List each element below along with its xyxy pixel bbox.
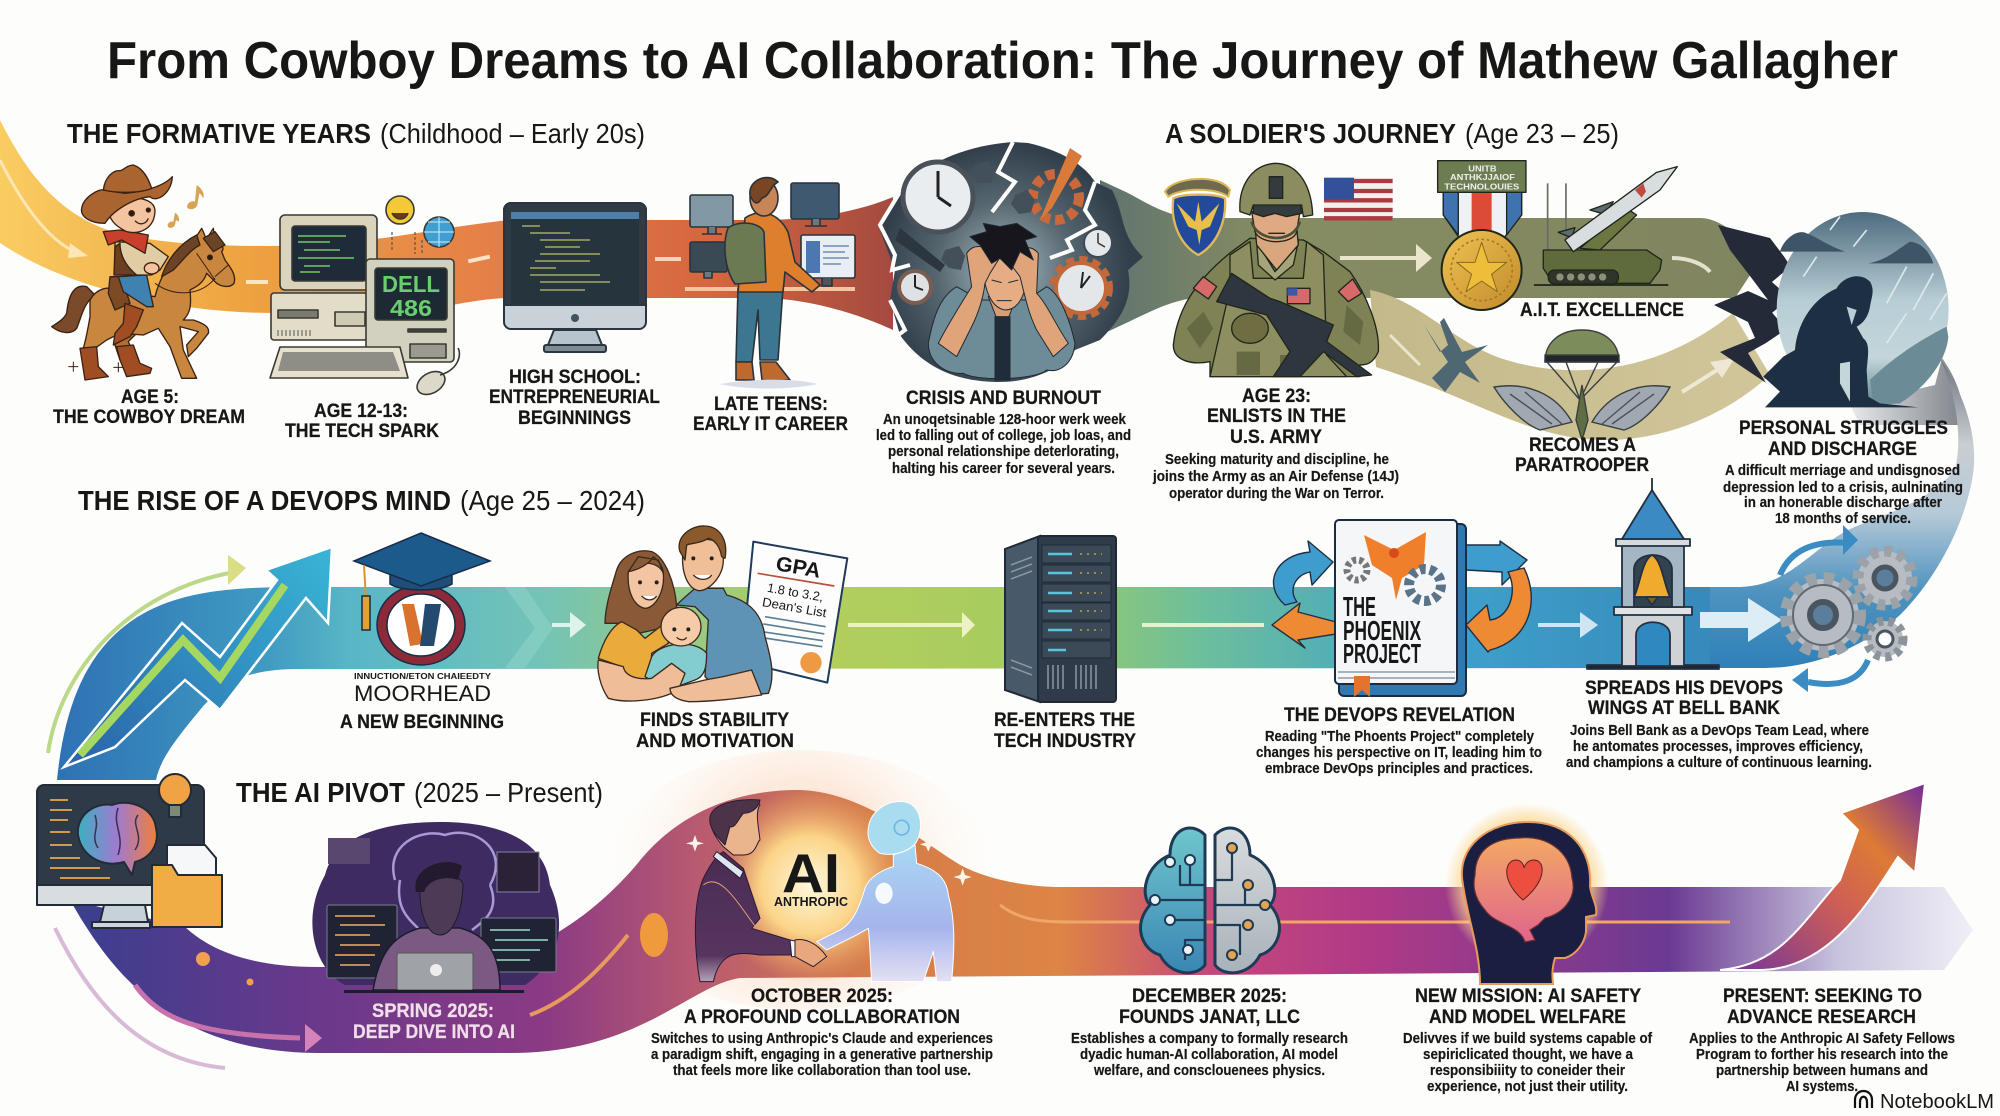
ribbon: shade beneath storm circle (1850, 358, 1968, 425)
ribbon: devops mind (57, 587, 1710, 780)
icon: high school monitor (504, 203, 646, 352)
cuff (790, 940, 797, 957)
small clock left (899, 271, 931, 303)
head (750, 180, 778, 216)
spurs (68, 362, 123, 372)
jeans (118, 275, 153, 307)
label: struggles (1739, 418, 1948, 460)
anthropic label: ANTHROPIC (774, 894, 849, 909)
floating panels (328, 838, 370, 864)
label: new mission: NEW MISSION: AI SAFETY (1415, 986, 1641, 1007)
icon: crisis and burnout (878, 142, 1143, 382)
horse tail (52, 286, 95, 333)
hind boots (80, 347, 108, 380)
far hind leg (115, 330, 140, 360)
text: army body (1152, 452, 1399, 502)
woman's arm (598, 660, 685, 701)
label: stability (636, 710, 794, 752)
label: present (1723, 986, 1922, 1028)
text: struggles body: A difficult merriage and undisgnosed (1725, 463, 1960, 479)
text: october body (651, 1031, 993, 1079)
crack lines (880, 142, 1095, 345)
label: age 12-13 (285, 401, 439, 442)
man's hair (710, 800, 760, 845)
label: october 2025: A PROFOUND COLLABORATION (684, 1007, 960, 1028)
orange gear and shard (1033, 148, 1082, 220)
right code panel (481, 918, 556, 972)
arrow: final rise (1720, 783, 1925, 970)
text: december body: welfare, and consclouenees physics. (1093, 1063, 1325, 1079)
glow (712, 787, 908, 983)
bulb (159, 774, 191, 806)
certificate (742, 542, 847, 683)
text: mission body: experience, not just their utility. (1427, 1079, 1628, 1095)
label: high school: HIGH SCHOOL: (509, 367, 641, 388)
icon: handshake with AI (686, 787, 972, 983)
label: age 23: AGE 23: (1242, 386, 1311, 407)
helmet (1240, 163, 1313, 217)
vest (1210, 242, 1347, 377)
monitor two (366, 259, 454, 362)
text: army body: operator during the War on Terror. (1169, 486, 1384, 502)
hat (81, 177, 172, 223)
brain outline (393, 833, 496, 930)
moorhead wordmark: MOORHEAD (354, 681, 491, 706)
bell (1634, 555, 1670, 597)
peach glow behind handshake (600, 750, 1000, 1010)
monitor one (280, 215, 377, 290)
thin mauve trail (55, 928, 225, 1068)
text: crisis body: personal relationshipe deterlorating, (888, 444, 1119, 460)
monitor bottom right (801, 235, 855, 278)
ribbon: soldier olive path (1100, 180, 1760, 335)
label: crisis: CRISIS AND BURNOUT (906, 388, 1101, 409)
monitor top right (791, 183, 839, 219)
text: crisis body: An unoqetsinable 128-hoor werk week (883, 412, 1127, 428)
label: devops revelation: THE DEVOPS REVELATION (1284, 705, 1515, 726)
laptop (397, 953, 473, 990)
big clock (903, 162, 973, 232)
figures (686, 800, 972, 982)
music notes (168, 185, 204, 228)
smiley (386, 196, 414, 224)
desk edge (685, 287, 855, 291)
text: present body: Program to forther his research into the (1696, 1047, 1948, 1063)
text: october body: Switches to using Anthropic's Claude and experiences (651, 1031, 993, 1047)
code lines (522, 226, 610, 290)
label: re-enters: RE-ENTERS THE (994, 710, 1135, 731)
text: struggles body: 18 months of service. (1775, 511, 1911, 527)
text: mission body: sepiriclicated thought, we have a (1423, 1047, 1634, 1063)
label: high school: BEGINNINGS (518, 408, 631, 429)
small gears (941, 161, 1035, 270)
text: army body: joins the Army as an Air Defense (14J) (1152, 469, 1399, 485)
section: devops heading: (Age 25 – 2024) (460, 485, 645, 516)
signal dashes (392, 232, 422, 254)
text: revelation body: embrace DevOps principles and practices. (1265, 761, 1533, 777)
label: spring 2025: SPRING 2025: (372, 1001, 494, 1022)
icon: server rack (1005, 536, 1116, 702)
hands (795, 940, 827, 967)
circuit traces (1155, 865, 1205, 960)
man's hair (679, 526, 726, 560)
neck (988, 297, 1017, 318)
medal plate (1438, 161, 1526, 192)
wings (1494, 386, 1670, 430)
label: paratrooper (1515, 435, 1649, 476)
woman's face (628, 563, 664, 608)
code (50, 800, 110, 878)
face (983, 259, 1027, 310)
chinstrap (1252, 222, 1300, 238)
stressed man (928, 223, 1075, 380)
tassel (364, 565, 366, 600)
left code panel (327, 905, 397, 978)
missile (1558, 202, 1613, 238)
base unit (271, 293, 367, 340)
chest light (875, 883, 893, 904)
label: new beginning: A NEW BEGINNING (340, 712, 504, 733)
tie (995, 317, 1010, 380)
badge tab (1165, 179, 1230, 197)
legs (736, 288, 783, 362)
icon: bell tower (1587, 478, 1719, 669)
label: late teens (693, 394, 848, 435)
icon: family and GPA certificate: Dean's List (761, 595, 828, 620)
dell screen text: DELL (382, 271, 440, 297)
icon: soldier, badge, flag, medal and launcher: TECHNOLOUIES (1444, 181, 1520, 191)
icon: graduation cap and seal (354, 533, 490, 665)
torso (1173, 238, 1378, 377)
label: age 23: U.S. ARMY (1230, 427, 1322, 448)
label: december 2025 (1119, 986, 1300, 1028)
lower tower (1622, 610, 1684, 666)
label: present: PRESENT: SEEKING TO (1723, 986, 1922, 1007)
section: soldier heading: (Age 23 – 25) (1465, 118, 1619, 149)
icon: soldier, badge, flag, medal and launcher: ANTHKJJAIOF (1450, 172, 1515, 182)
icon: phoenix project book (1335, 520, 1466, 697)
jagged backdrop (878, 142, 1143, 382)
man's forearm (670, 670, 762, 702)
rifle (1217, 273, 1372, 377)
label: december 2025: FOUNDS JANAT, LLC (1119, 1007, 1300, 1028)
label: AIT: A.I.T. EXCELLENCE (1520, 300, 1684, 321)
chevrons on devops ribbon (505, 587, 553, 668)
label: age 23: ENLISTS IN THE (1207, 406, 1346, 427)
text: october body: a paradigm shift, engaging in a generative partnership (651, 1047, 993, 1063)
gpa values: 1.8 to 3.2, (766, 581, 824, 604)
arrows around gears (1780, 525, 1868, 692)
horse body (83, 228, 235, 378)
icon: head with heart brain (1445, 803, 1609, 984)
icon: retro computers (270, 196, 459, 399)
text: mission body: Delivves if we build systems capable of (1403, 1031, 1652, 1047)
medal disc (1442, 230, 1522, 310)
rain (1803, 217, 1947, 343)
label: age 12-13: THE TECH SPARK (285, 421, 439, 442)
rider boot (113, 303, 143, 345)
label: age 5 (53, 387, 245, 428)
text: present body: partnership between humans and (1716, 1063, 1928, 1079)
book gears (1409, 569, 1441, 601)
icon: family and GPA certificate (598, 526, 847, 702)
torso (115, 242, 168, 275)
man's face (683, 539, 723, 591)
text: struggles body (1723, 463, 1963, 527)
AI logo: AI (782, 842, 840, 904)
section: formative years heading: (Childhood – Early 20s) (380, 118, 645, 149)
badge shield (1173, 195, 1225, 255)
label: stability: FINDS STABILITY (640, 710, 789, 731)
goggles (1253, 203, 1302, 217)
text: present body: AI systems. (1786, 1079, 1858, 1095)
text: struggles body: in an honerable discharge after (1744, 495, 1942, 511)
icon: dark lightning break (1714, 225, 1793, 393)
section: formative years heading: THE FORMATIVE YEARS (67, 118, 371, 149)
section: formative years heading (67, 118, 645, 149)
right hemisphere (1215, 828, 1279, 973)
label: high school: ENTREPRENEURIAL (489, 387, 660, 408)
small clock right (1084, 229, 1112, 257)
icon: retro computers: 486 (390, 295, 432, 321)
label: spring 2025: DEEP DIVE INTO AI (353, 1022, 515, 1043)
icon: plane silhouette (1424, 318, 1488, 392)
bookmark (1354, 676, 1370, 697)
document (167, 845, 216, 885)
label: spring 2025 (353, 1001, 515, 1043)
section: soldier heading: A SOLDIER'S JOURNEY (1165, 118, 1456, 149)
label: paratrooper: RECOMES A (1529, 435, 1636, 456)
mouse (413, 367, 449, 399)
canopy (1545, 330, 1619, 362)
woman's hair (605, 551, 677, 635)
glove (1232, 313, 1268, 343)
colored brain (78, 803, 157, 875)
hair (970, 223, 1037, 270)
text: bell bank body: Joins Bell Bank as a DevOps Team Lead, where (1570, 723, 1869, 739)
text: crisis body (876, 412, 1131, 477)
section: AI pivot heading: (2025 – Present) (414, 777, 603, 808)
section: AI pivot heading (236, 777, 603, 808)
text: present body (1689, 1031, 1955, 1095)
icon: monitor with brain and folder (37, 774, 222, 928)
man's head (711, 801, 760, 855)
gpa text: GPA (774, 552, 822, 583)
cap board (354, 533, 490, 586)
launcher arm (1580, 208, 1637, 250)
hoodie (738, 213, 820, 292)
woman's shirt (598, 622, 668, 680)
baby body (645, 644, 707, 690)
book stripes (402, 604, 423, 646)
ribbon: paratrooper tan path (1370, 290, 1770, 440)
ribbon: AI pivot (70, 790, 1973, 1053)
flag (1324, 178, 1393, 220)
icon: storm circle with sitting figure (1763, 212, 1949, 407)
text: revelation body: changes his perspective on IT, leading him to (1256, 745, 1542, 761)
keyboard (270, 347, 408, 378)
label: stability: AND MOTIVATION (636, 731, 794, 752)
label: age 12-13: AGE 12-13: (314, 401, 408, 422)
arrow: ribbon flow markers (0, 160, 1782, 1052)
arrows: devops cycle (1272, 541, 1531, 652)
medal plate text: UNITB (1468, 164, 1497, 174)
chest flag (1287, 288, 1310, 304)
saddle (108, 277, 130, 310)
label: bell bank (1585, 678, 1783, 719)
text: crisis body: led to falling out of college, job loas, and (876, 428, 1131, 444)
label: october 2025 (684, 986, 960, 1028)
text: struggles body: depression led to a crisis, aulninating (1723, 480, 1963, 496)
roof (1622, 490, 1684, 539)
shoulder flags (1193, 277, 1217, 299)
text: mission body (1403, 1031, 1652, 1095)
label: re-enters: TECH INDUSTRY (994, 731, 1136, 752)
icon: cowboy on horse (52, 165, 235, 380)
man's shirt (677, 588, 772, 695)
text: mission body: responsibiiity to coneider their (1430, 1063, 1625, 1079)
icon: developer with AI brain (312, 822, 559, 993)
label: age 5: AGE 5: (121, 387, 179, 408)
wrench silhouette (895, 228, 945, 272)
icon: late teen with monitors (685, 178, 855, 388)
section: devops heading: THE RISE OF A DEVOPS MIND (78, 485, 451, 516)
label: bell bank: SPREADS HIS DEVOPS (1585, 678, 1783, 699)
text: december body (1071, 1031, 1348, 1079)
label: struggles: AND DISCHARGE (1768, 439, 1917, 460)
label: struggles: PERSONAL STRUGGLES (1739, 418, 1948, 439)
label: late teens: EARLY IT CAREER (693, 414, 848, 435)
title: From Cowboy Dreams to AI Collaboration: The Journey of Mathew Gallagher (107, 32, 1898, 90)
bandana (103, 230, 148, 253)
medal ribbon (1443, 192, 1522, 237)
lines (1547, 362, 1617, 400)
left hemisphere (1141, 828, 1205, 973)
text: october body: that feels more like collaboration than tool use. (673, 1063, 971, 1079)
label: new mission (1415, 986, 1641, 1028)
label: december 2025: DECEMBER 2025: (1132, 986, 1287, 1007)
icon: gears (1787, 551, 1912, 657)
ribbon accent line (1000, 905, 1730, 922)
arms (938, 246, 998, 357)
figure (1763, 276, 1918, 407)
robot (817, 845, 954, 982)
label: high school (489, 367, 660, 429)
label: late teens: LATE TEENS: (714, 394, 828, 415)
label: paratrooper: PARATROOPER (1515, 455, 1649, 476)
gear clock (1053, 260, 1109, 316)
arrow: rising zigzag (48, 547, 332, 767)
suit (695, 852, 795, 982)
section: AI pivot heading: THE AI PIVOT (236, 777, 405, 808)
text: bell bank body: and champions a culture of continuous learning. (1566, 755, 1872, 771)
icon: phoenix project book: PHOENIX (1343, 615, 1421, 646)
icon: circuit brain (1141, 828, 1279, 973)
mane (162, 235, 200, 277)
folder (152, 865, 222, 927)
label: age 23 (1207, 386, 1346, 448)
bridle (155, 253, 228, 293)
boots (736, 362, 790, 380)
text: revelation body (1256, 729, 1542, 777)
upper tower (1622, 545, 1684, 607)
face (1252, 212, 1300, 242)
neck (1255, 227, 1298, 270)
icon: soldier, badge, flag, medal and launcher (1165, 161, 1677, 377)
cap crown (390, 555, 452, 590)
text: december body: Establishes a company to formally research (1071, 1031, 1348, 1047)
monitor top left (690, 195, 733, 227)
clouds (1780, 232, 1933, 263)
book title: THE (1343, 591, 1376, 622)
robot head (868, 802, 921, 854)
ribbon: descent from struggles to devops (1700, 358, 1974, 668)
hand (144, 263, 159, 274)
camo patches (1187, 305, 1363, 375)
watermark: NotebookLM: NotebookLM (1880, 1091, 1994, 1113)
text: crisis body: halting his career for several years. (892, 461, 1115, 477)
developer (373, 928, 500, 990)
face (108, 198, 155, 232)
label: october 2025: OCTOBER 2025: (751, 986, 893, 1007)
text: december body: dyadic human-AI collaboration, AI model (1080, 1047, 1338, 1063)
monitor bottom left (690, 242, 727, 272)
icon: phoenix project book: PROJECT (1343, 638, 1421, 669)
sparkles (686, 835, 972, 886)
text: bell bank body (1566, 723, 1872, 771)
moorhead wordmark (354, 672, 492, 706)
label: new mission: AND MODEL WELFARE (1429, 1007, 1626, 1028)
text: revelation body: Reading "The Phoents Project" completely (1265, 729, 1534, 745)
seal (377, 585, 465, 665)
text: present body: Applies to the Anthropic AI Safety Fellows (1689, 1031, 1955, 1047)
baby head (661, 607, 701, 646)
launcher masts (1548, 183, 1566, 250)
text: bell bank body: he antomates processes, improves efficiency, (1573, 739, 1863, 755)
label: re-enters (994, 710, 1136, 752)
ribbon: formative years (0, 120, 893, 330)
ledge (1614, 607, 1692, 615)
collar (713, 852, 743, 878)
globe (424, 217, 454, 247)
label: present: ADVANCE RESEARCH (1727, 1007, 1916, 1028)
label: age 5: THE COWBOY DREAM (53, 407, 245, 428)
tank hull (1543, 250, 1662, 283)
backpack (725, 223, 766, 284)
text: army body: Seeking maturity and discipline, he (1165, 452, 1389, 468)
label: bell bank: WINGS AT BELL BANK (1588, 698, 1780, 719)
phoenix (1364, 532, 1426, 600)
suit seam (703, 882, 757, 928)
icon: parachute wings (1494, 330, 1670, 440)
moorhead wordmark: INNUCTION/ETON CHAIEEDTY (354, 672, 492, 681)
shirt (928, 287, 1075, 379)
